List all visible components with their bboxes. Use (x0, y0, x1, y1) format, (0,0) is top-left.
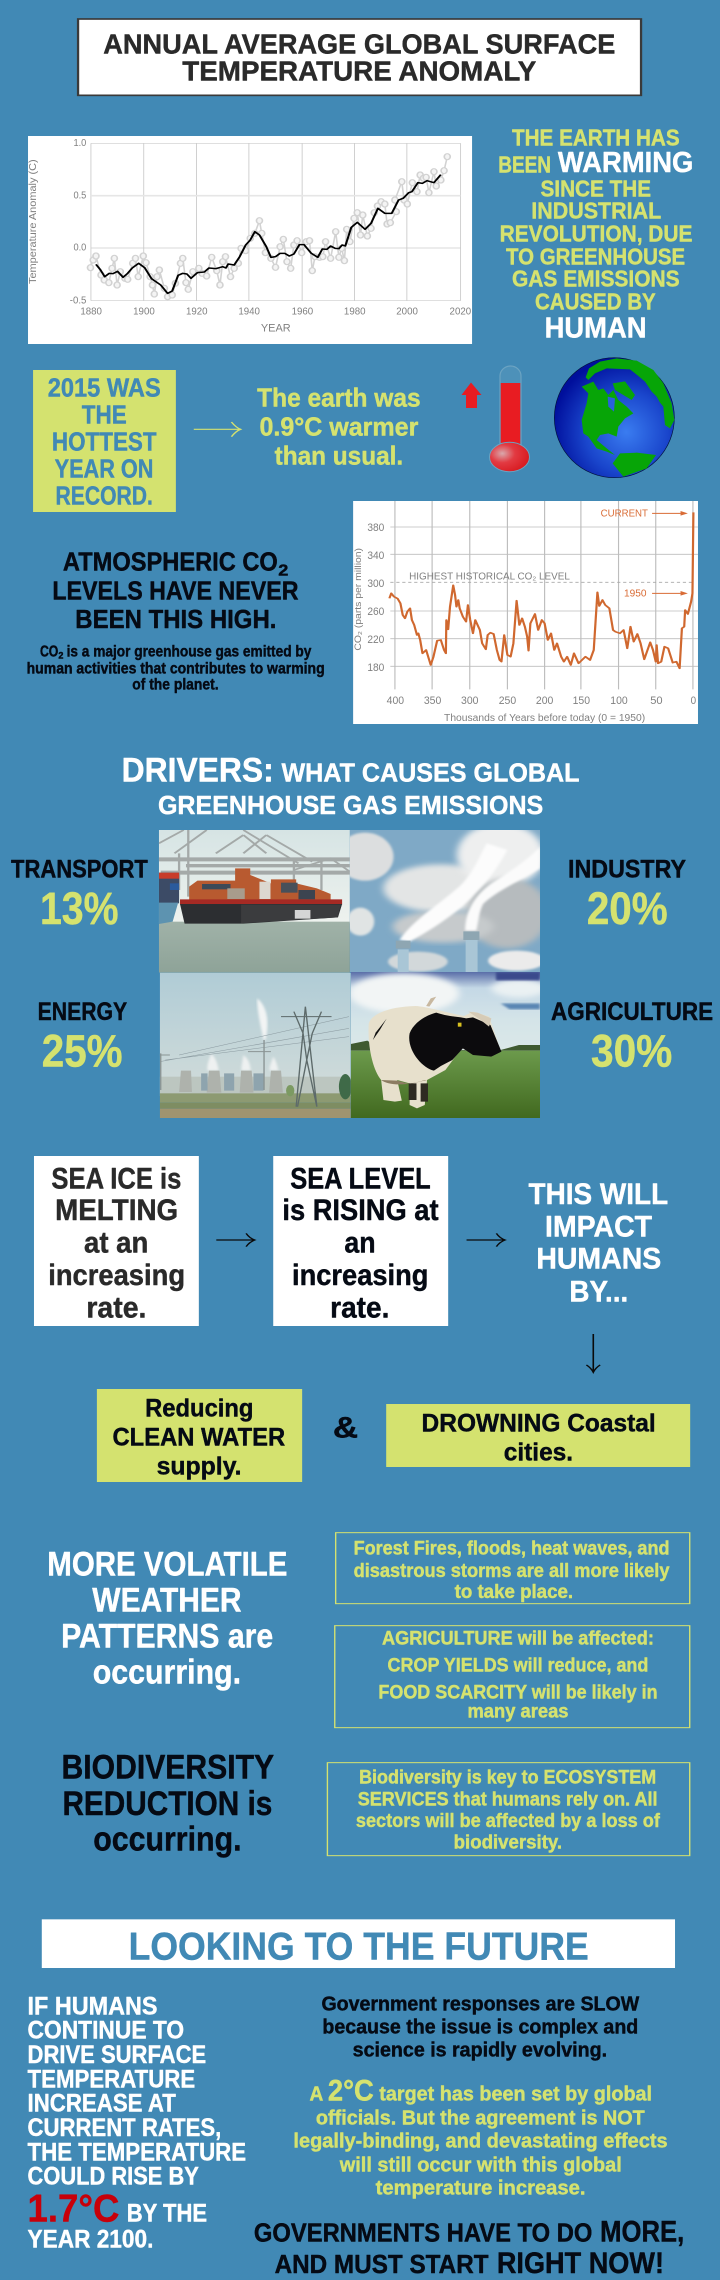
box: reducing clean water supply: Reducing (145, 1394, 253, 1422)
heading: atmospheric CO2 levels: BEEN THIS HIGH. (75, 605, 276, 634)
heading: more volatile weather patterns: MORE VOLATILE (47, 1545, 287, 1583)
stat: energy: ENERGY (38, 998, 127, 1026)
heading: drivers: WHAT CAUSES GLOBAL (281, 758, 580, 787)
line chart: temperature anomaly 1880-2020: 1980 (344, 305, 366, 317)
heading: drivers: GREENHOUSE GAS EMISSIONS (158, 791, 543, 820)
text block: projected temperature rise: YEAR 2100. (28, 2226, 153, 2253)
section: looking to the future (28, 1919, 684, 2280)
section: weather and biodiversity (47, 1533, 690, 1858)
box: sea level rising: increasing (292, 1259, 428, 1292)
arrow: hottest year to warmer (194, 422, 241, 437)
text block: projected temperature rise: CONTINUE TO (28, 2017, 184, 2044)
text block: CO2 explanation: of the planet. (132, 676, 219, 693)
line chart: temperature anomaly 1880-2020: 1.0 (73, 137, 87, 148)
line chart: atmospheric CO2 over 400k years: 300 (461, 694, 478, 706)
text block: this will impact humans by: HUMANS (536, 1243, 661, 1275)
section: drivers (11, 751, 713, 1118)
box: sea level rising (273, 1156, 448, 1326)
line chart: temperature anomaly 1880-2020: 1880 (80, 305, 102, 317)
line chart: temperature anomaly 1880-2020: 0.0 (73, 242, 87, 253)
heading: more volatile weather patterns (47, 1545, 287, 1691)
text block: projected temperature rise: DRIVE SURFACE (28, 2041, 206, 2069)
text block: this will impact humans by: IMPACT (545, 1211, 652, 1243)
box: sea level rising: is RISING at (282, 1194, 439, 1227)
text block: 2 degree target: will still occur with this global (339, 2154, 622, 2176)
heading: more volatile weather patterns: WEATHER (92, 1581, 242, 1619)
stat: industry: 20% (587, 883, 668, 934)
box: sea level rising: an (344, 1227, 376, 1259)
photo: container ship (transport) (159, 830, 350, 973)
line chart: temperature anomaly 1880-2020: 1900 (133, 305, 155, 317)
text block: the earth was warmer: 0.9°C warmer (259, 412, 418, 441)
box: biodiversity ecosystem services (327, 1763, 690, 1856)
box: sea ice melting: SEA ICE is (51, 1163, 181, 1195)
call to action (254, 2216, 684, 2280)
box: agriculture effects: many areas (467, 1700, 568, 1722)
line chart: temperature anomaly 1880-2020: 2000 (396, 305, 418, 317)
text block: the earth was warmer: The earth was (257, 383, 421, 412)
text block: 2 degree target: temperature increase. (376, 2177, 585, 2199)
text block: CO2 explanation: CO (40, 643, 58, 660)
section: temperature anomaly overview (27, 19, 693, 512)
text block: the earth has been warming: HUMAN (545, 312, 647, 344)
heading: atmospheric CO2 levels: 2 (278, 562, 288, 579)
callout: 2015 hottest year: HOTTEST (52, 427, 157, 456)
heading: biodiversity reduction (62, 1748, 274, 1858)
text block: the earth has been warming: CAUSED BY (535, 289, 656, 314)
line chart: atmospheric CO2 over 400k years: 100 (610, 694, 628, 706)
box: sea ice melting: increasing (48, 1259, 185, 1292)
heading: atmospheric CO2 levels: LEVELS HAVE NEVER (52, 576, 298, 605)
heading: drivers (122, 751, 580, 820)
line chart: temperature anomaly 1880-2020: 1940 (238, 305, 260, 317)
arrow: sea level to impact (467, 1233, 505, 1247)
arrow: down to impacts (586, 1334, 600, 1372)
ampersand: & (333, 1412, 358, 1444)
callout: 2015 hottest year (33, 370, 176, 512)
stat: energy (38, 998, 127, 1077)
line chart: atmospheric CO2 over 400k years: 250 (499, 694, 516, 706)
callout: 2015 hottest year: 2015 WAS (48, 373, 161, 402)
line chart: atmospheric CO2 over 400k years: CO₂ (parts per million) (352, 548, 363, 651)
line chart: atmospheric CO2 over 400k years: 350 (424, 694, 441, 706)
icon: globe (554, 358, 674, 478)
line chart: atmospheric CO2 over 400k years: 200 (536, 694, 553, 706)
text block: projected temperature rise (28, 1993, 246, 2253)
box: sea level rising: SEA LEVEL (290, 1163, 431, 1195)
heading: biodiversity reduction: BIODIVERSITY (62, 1748, 274, 1786)
line chart: temperature anomaly 1880-2020: -0.5 (70, 294, 87, 306)
box: sea ice melting (34, 1156, 199, 1326)
text block: projected temperature rise: TEMPERATURE (28, 2066, 195, 2093)
box: reducing clean water supply: supply. (157, 1452, 242, 1480)
line chart: atmospheric CO2 over 400k years: 180 (367, 661, 384, 673)
stat: agriculture: 30% (591, 1026, 672, 1077)
line chart: atmospheric CO2 over 400k years: CURRENT (601, 508, 648, 519)
text block: projected temperature rise: BY THE (127, 2200, 207, 2227)
box: drowning coastal cities: cities. (504, 1438, 573, 1466)
line chart: atmospheric CO2 over 400k years: 260 (367, 605, 384, 617)
line chart: atmospheric CO2 over 400k years: 380 (367, 521, 384, 533)
title box (78, 19, 641, 95)
text block: government responses (321, 1993, 639, 2061)
box: drowning coastal cities (386, 1404, 690, 1467)
photo: power station (energy) (158, 973, 352, 1118)
line chart: temperature anomaly 1880-2020: 2020 (450, 305, 471, 317)
text block: the earth was warmer: than usual. (275, 441, 403, 470)
text block: CO2 explanation (27, 643, 325, 693)
line chart: temperature anomaly 1880-2020: 1960 (292, 305, 313, 317)
heading: more volatile weather patterns: PATTERNS are (61, 1617, 273, 1655)
text block: 2 degree target (293, 2073, 668, 2199)
line chart: temperature anomaly 1880-2020: 0.5 (73, 189, 87, 201)
line chart: atmospheric CO2 over 400k years: HIGHEST HISTORICAL CO₂ LEVEL (409, 570, 570, 582)
box: reducing clean water supply: CLEAN WATER (113, 1423, 285, 1451)
line chart: atmospheric CO2 over 400k years: 150 (573, 694, 590, 706)
text block: projected temperature rise: CURRENT RATES, (28, 2114, 221, 2142)
box: extreme weather: to take place. (455, 1581, 573, 1602)
line chart: temperature anomaly 1880-2020: YEAR (261, 321, 291, 334)
text block: the earth was warmer (257, 383, 421, 470)
line chart: temperature anomaly 1880-2020: Temperature Anomaly (C) (27, 159, 38, 284)
box: sea ice melting: at an (84, 1227, 148, 1259)
text block: CO2 explanation: is a major greenhouse gas emitted by (67, 643, 312, 660)
line chart: temperature anomaly 1880-2020 (27, 136, 472, 344)
text block: 2 degree target: A (310, 2083, 323, 2106)
text block: projected temperature rise: COULD RISE BY (28, 2163, 199, 2190)
box: sea ice melting: rate. (86, 1292, 146, 1324)
box: reducing clean water supply (97, 1389, 302, 1482)
heading: atmospheric CO2 levels (52, 547, 298, 634)
line chart: atmospheric CO2 over 400k years: 0 (691, 694, 696, 706)
stat: transport (11, 855, 148, 934)
arrow: sea ice to sea level (216, 1233, 255, 1247)
text block: the earth has been warming: BEEN (498, 152, 551, 178)
title box: TEMPERATURE ANOMALY (182, 56, 536, 87)
box: sea level rising: rate. (330, 1292, 389, 1324)
callout: 2015 hottest year: RECORD. (56, 481, 153, 510)
line chart: atmospheric CO2 over 400k years: 1950 (624, 588, 647, 599)
stat: industry (568, 855, 686, 934)
line chart: atmospheric CO2 over 400k years: Thousands of Years before today (0 = 1950) (444, 712, 645, 723)
stat: transport: 13% (40, 883, 118, 934)
heading: biodiversity reduction: REDUCTION is (62, 1784, 272, 1822)
heading: more volatile weather patterns: occurring. (93, 1653, 241, 1691)
box: sea ice melting: MELTING (55, 1194, 178, 1227)
photo: cow (agriculture) (349, 972, 546, 1118)
icon: thermometer (490, 366, 530, 472)
heading: biodiversity reduction: occurring. (93, 1820, 242, 1858)
line chart: atmospheric CO2 over 400k years: 220 (367, 633, 384, 645)
line chart: atmospheric CO2 over 400k years: 50 (650, 694, 663, 706)
text block: the earth has been warming (498, 125, 693, 344)
heading: drivers: DRIVERS: (122, 751, 274, 789)
text block: the earth has been warming: SINCE THE (540, 176, 651, 202)
line chart: atmospheric CO2 over 400k years: 400 (387, 694, 404, 706)
text block: projected temperature rise: THE TEMPERATURE (28, 2139, 246, 2166)
text block: projected temperature rise: 1.7°C (28, 2187, 119, 2231)
text block: projected temperature rise: IF HUMANS (28, 1993, 158, 2020)
text block: government responses: science is rapidly evolving. (353, 2039, 607, 2061)
text block: CO2 explanation: 2 (58, 651, 63, 661)
stat: transport: TRANSPORT (11, 855, 148, 883)
photo: factory smoke (industry) (350, 830, 540, 972)
box: extreme weather (336, 1533, 690, 1604)
text block: the earth has been warming: INDUSTRIAL (531, 198, 661, 224)
text block: CO2 explanation: human activities that contributes to warming (27, 660, 325, 677)
box: agriculture effects (335, 1626, 690, 1728)
callout: 2015 hottest year: YEAR ON (55, 454, 153, 483)
text block: 2 degree target: 2°C (328, 2073, 374, 2107)
box: biodiversity ecosystem services: biodiversity. (454, 1831, 562, 1852)
stat: energy: 25% (42, 1026, 123, 1077)
line chart: atmospheric CO2 over 400k years: 340 (367, 549, 384, 561)
text block: this will impact humans by (529, 1178, 668, 1308)
section: sea ice and sea level flow (34, 1156, 690, 1482)
stat: agriculture (551, 998, 713, 1077)
line chart: atmospheric CO2 over 400k years (352, 501, 698, 724)
call to action: AND MUST START (275, 2250, 489, 2279)
text block: this will impact humans by: BY... (569, 1276, 628, 1308)
section: atmospheric CO2 (27, 501, 698, 724)
line chart: temperature anomaly 1880-2020: 1920 (186, 305, 208, 317)
icon: red up arrow (462, 382, 482, 408)
callout: 2015 hottest year: THE (82, 400, 127, 429)
heading: atmospheric CO2 levels: ATMOSPHERIC CO (63, 547, 278, 576)
text block: projected temperature rise: INCREASE AT (28, 2090, 176, 2117)
line chart: atmospheric CO2 over 400k years: 300 (367, 577, 384, 589)
